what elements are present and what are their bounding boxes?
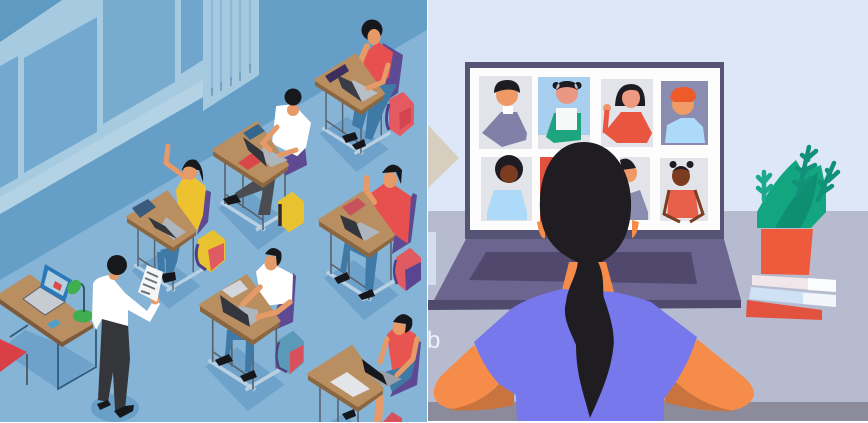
classroom floor (0, 30, 427, 422)
left arm shadow (447, 384, 514, 410)
open book (330, 372, 370, 397)
desk surface (428, 211, 868, 403)
raised arm (166, 146, 185, 177)
head (284, 88, 302, 116)
shoes (161, 272, 176, 283)
shirt (92, 275, 160, 330)
laptop deck (434, 239, 741, 300)
torso (177, 173, 205, 229)
pot (761, 229, 813, 275)
arm on face (358, 46, 367, 67)
laptop screen (40, 264, 72, 302)
torso (363, 182, 410, 242)
right arm (676, 339, 754, 411)
leaves (757, 147, 838, 228)
arm (263, 127, 296, 155)
trousers (98, 319, 130, 410)
backpack (383, 412, 402, 422)
desk frame (324, 228, 401, 320)
head (382, 165, 402, 188)
pants (235, 165, 285, 215)
book blue (243, 124, 265, 140)
laptop (362, 359, 387, 385)
keyboard (372, 370, 402, 387)
chair (280, 147, 307, 176)
video tile 4 (661, 81, 708, 145)
ponytail (565, 258, 614, 418)
books (325, 64, 349, 83)
panel: classroom (0, 0, 427, 422)
video tile 2 (538, 77, 590, 149)
desk top (315, 54, 384, 115)
hair (540, 142, 631, 262)
desk frame (320, 87, 390, 172)
books (342, 198, 366, 216)
red book (746, 300, 822, 320)
keyboard (352, 222, 380, 241)
woman from behind (434, 142, 754, 421)
light box (428, 232, 436, 285)
arms (243, 287, 290, 317)
red chair (0, 339, 27, 385)
desk edge (428, 402, 868, 421)
shirt (474, 289, 697, 421)
shoes (342, 132, 366, 150)
backpack (276, 332, 303, 374)
keyboard recess (469, 252, 697, 284)
classroom wall (0, 0, 427, 422)
skin leg (378, 395, 380, 422)
keyboard (348, 80, 378, 102)
head (392, 314, 412, 335)
desk top (213, 122, 288, 188)
desk top (200, 275, 280, 345)
open paper (222, 280, 248, 298)
pink book (752, 275, 836, 292)
desk frame (218, 158, 295, 250)
shoes (97, 400, 134, 418)
video tile 3 (601, 79, 653, 147)
torso (365, 43, 392, 83)
teacher desk (0, 264, 96, 389)
book red (238, 153, 262, 170)
phone (47, 319, 61, 329)
video tile 5 (481, 155, 532, 221)
desk legs (320, 382, 380, 422)
curtain (203, 0, 259, 111)
keyboard (238, 305, 258, 327)
video tile 7 (620, 157, 650, 220)
hand (150, 296, 160, 304)
jeans (385, 362, 415, 392)
head (362, 20, 382, 45)
arms (380, 339, 417, 375)
backpack (279, 193, 303, 231)
right arm shadow (664, 382, 734, 411)
books (746, 275, 836, 320)
backpack (196, 231, 224, 271)
teacher (91, 255, 163, 422)
beige object (428, 125, 459, 188)
desk top (127, 191, 196, 252)
shoe (342, 409, 356, 420)
screen frame (465, 62, 724, 239)
laptop (243, 137, 267, 167)
student red shirt (319, 165, 421, 320)
head (182, 159, 203, 182)
desk shadow (0, 330, 95, 389)
head (107, 255, 127, 280)
arm typing (368, 65, 388, 88)
desk frame (205, 313, 287, 411)
desk floor shadow (330, 414, 353, 422)
floor shadow (91, 394, 139, 422)
jeans (340, 235, 392, 290)
laptop (148, 217, 177, 239)
chair (376, 43, 403, 103)
keyboard (259, 147, 288, 167)
student white shirt front (200, 248, 303, 411)
student yellow shirt (127, 146, 224, 309)
laptop (220, 295, 250, 327)
shoes (334, 272, 375, 300)
shoes (215, 354, 257, 382)
paper (138, 265, 163, 302)
neck (562, 262, 614, 292)
desk frame (10, 325, 96, 389)
blue book (749, 287, 836, 307)
student white shirt (213, 88, 310, 250)
jeans (225, 312, 275, 372)
chair (197, 190, 211, 235)
raised hand (367, 178, 374, 202)
books (132, 199, 156, 218)
letter: b (427, 327, 440, 354)
jeans (352, 84, 397, 140)
student bottom right (308, 314, 421, 422)
panel: online class (427, 0, 868, 421)
jeans (157, 245, 180, 275)
laptop (428, 62, 741, 310)
window (0, 0, 203, 214)
torso (273, 105, 310, 155)
chair (390, 340, 421, 397)
backpack (386, 93, 413, 135)
shoe (223, 194, 241, 205)
desk frame (132, 224, 202, 309)
video tile 8 (660, 158, 708, 222)
wall (428, 0, 868, 212)
chair (268, 273, 296, 333)
front lip (428, 300, 741, 310)
laptop (337, 75, 362, 102)
backpack (394, 249, 421, 291)
left arm (434, 345, 499, 409)
torso (388, 325, 415, 369)
video tile 1 (479, 76, 532, 149)
laptop (340, 215, 363, 240)
desk top (0, 274, 93, 347)
student top right (315, 20, 413, 172)
ears (537, 220, 639, 238)
desk top (308, 346, 383, 412)
plant (757, 147, 838, 275)
chair (392, 193, 417, 254)
head (264, 248, 282, 270)
torso (257, 262, 292, 305)
desk lamp (64, 277, 93, 322)
keyboard (23, 287, 65, 315)
video tile 6 (540, 157, 590, 230)
keyboard (160, 217, 186, 240)
desk top (319, 192, 394, 258)
screen (470, 68, 720, 230)
